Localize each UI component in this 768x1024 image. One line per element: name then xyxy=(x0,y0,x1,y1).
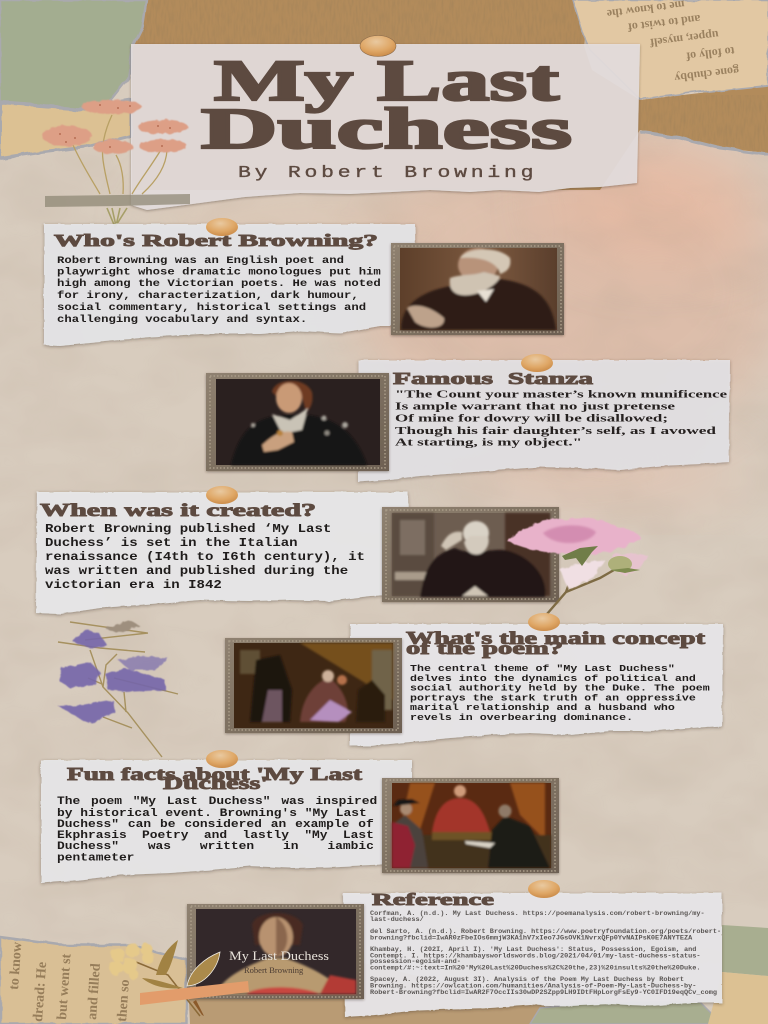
newspaper text: bottom left: and filled xyxy=(85,963,104,1020)
newspaper text: top right: and to twist of xyxy=(626,12,701,35)
reference list: Contempt. I. https://khambaysworldswords.blog/2021/04/01/my-last-duchess-status- xyxy=(370,953,701,959)
newspaper text: bottom left xyxy=(7,941,133,1022)
title text: My Last xyxy=(214,48,560,113)
reference list: Spacey, A. (2022, August 3I). Analysis of the Poem My Last Duchess by Robert xyxy=(370,976,684,983)
newspaper text: top right: to folly of xyxy=(685,44,736,64)
cover author: Robert Browning xyxy=(244,965,304,975)
body text: victorian era in I842 xyxy=(45,578,222,592)
reference list: Khambay, H. (202I, April I). 'My Last Duchess': Status, Possession, Egoism, and xyxy=(370,946,696,953)
reference list: contempt/#:~:text=In%20'My%20Last%20Duchess%2C%20the,23)%20insults%20the%20Duke. xyxy=(370,965,701,971)
body text xyxy=(57,795,377,864)
newspaper text: bottom left: then so xyxy=(115,979,133,1022)
heading: What's the main concept xyxy=(406,628,705,648)
heading second line: Duchess' xyxy=(163,773,268,793)
body text: playwright whose dramatic monologues put him xyxy=(57,266,381,278)
body text: Robert Browning was an English poet and xyxy=(57,255,344,267)
newspaper text: bottom left: dread: He xyxy=(31,961,50,1022)
body text: marital relationship and a husband who xyxy=(410,703,675,714)
heading: When was it created? xyxy=(40,500,316,520)
stanza text: "The Count your master’s known munificence xyxy=(395,388,727,400)
body text: pentameter xyxy=(57,851,134,864)
body text: Duchess’ is set in the Italian xyxy=(45,536,298,550)
newspaper text: top right: upper, myself xyxy=(648,28,719,50)
body text: renaissance (I4th to I6th century), it xyxy=(45,550,365,564)
title panel xyxy=(131,36,640,210)
body text: high among the Victorian poets. He was noted xyxy=(57,278,381,290)
pin xyxy=(528,613,560,631)
newspaper text: top right xyxy=(605,0,740,93)
image: painting of a noblewoman xyxy=(206,373,389,471)
newspaper scrap: bottom left xyxy=(0,937,187,1024)
subtitle: By Robert Browning xyxy=(238,163,537,182)
icon: yellow flowers, leaves and orange tape xyxy=(109,940,249,1016)
body text: for irony, characterization, dark humour, xyxy=(57,290,359,302)
title text second line: Duchess xyxy=(201,96,572,161)
body text: social authority held by the Duke. The poem xyxy=(410,683,710,694)
body text: portrays the stark truth of an oppressive xyxy=(410,693,696,704)
image: portrait of Robert Browning xyxy=(391,243,564,335)
heading second line: of the poem? xyxy=(406,638,563,658)
body text: challenging vocabulary and syntax. xyxy=(57,314,307,326)
panel: Fun facts xyxy=(41,750,412,883)
pin xyxy=(360,36,396,56)
reference list: del Sarto, A. (n.d.). Robert Browning. https://www.poetryfoundation.org/poets/robert- xyxy=(370,928,721,935)
heading: Who's Robert Browning? xyxy=(54,231,378,250)
panel: Famous Stanza xyxy=(358,354,730,482)
panel: When was it created xyxy=(36,486,409,614)
pin xyxy=(528,880,560,898)
body text: by historical event. Browning's "My Last xyxy=(57,807,367,820)
pin xyxy=(521,354,553,372)
body text xyxy=(410,664,710,724)
icon: pink rose xyxy=(507,518,648,614)
body text: Ekphrasis Poetry and lastly "My Last xyxy=(57,829,374,842)
heading: Fun facts about 'My Last xyxy=(67,764,362,784)
body text: revels in overbearing dominance. xyxy=(410,713,633,724)
body text: The central theme of "My Last Duchess" xyxy=(410,664,675,675)
body text: was written and published during the xyxy=(45,564,348,578)
image: photograph of Browning seated xyxy=(382,507,559,602)
reference list: possession-egoism-and- xyxy=(370,958,461,965)
reference list: Corfman, A. (n.d.). My Last Duchess. https://poemanalysis.com/robert-browning/my- xyxy=(370,910,705,917)
cover title: My Last Duchess xyxy=(229,949,329,963)
pin xyxy=(206,750,238,768)
reference list: Browning. https://owlcation.com/humanities/Analysis-of-Poem-My-Last-Duchess-by- xyxy=(370,983,696,989)
body text: delves into the dynamics of political and xyxy=(410,674,696,685)
body text xyxy=(57,255,381,326)
body text: Duchess" was written in iambic xyxy=(57,840,374,853)
image: book cover portrait of the Duchess xyxy=(187,904,364,999)
body text xyxy=(45,522,365,592)
body text: Duchess" can be considered an example of xyxy=(57,818,374,831)
reference list: Robert-Browning?fbclid=IwAR2F7OccIIs30wDP2SZpp9LH9IDtFHpLorgFsEy9-YC0IFD19eqQCv_comg xyxy=(370,989,717,996)
heading: Famous Stanza xyxy=(393,369,594,388)
panel: main concept xyxy=(350,613,723,746)
icon: dried flowers with tape xyxy=(42,100,190,227)
image: domestic scene painting xyxy=(225,638,402,733)
stanza text: Though his fair daughter’s self, as I avowed xyxy=(395,425,716,437)
body text: The poem "My Last Duchess" was inspired xyxy=(57,795,377,808)
reference list xyxy=(370,910,721,996)
stanza text: Of mine for dowry will be disallowed; xyxy=(395,412,668,424)
stanza text: Is ample warrant that no just pretense xyxy=(395,400,675,412)
reference list: last-duchess/ xyxy=(370,916,424,923)
panel: Reference xyxy=(343,880,722,1017)
reference list: browning?fbclid=IwAR0zFbeIOs6mmjW3KA1hV7xIeo7JGsOVK1NvrxQFp0YvNAIPsK0E7ANYTEZA xyxy=(370,935,692,941)
newspaper text: bottom left: to know xyxy=(7,941,25,990)
body text: social commentary, historical settings and xyxy=(57,302,366,314)
stanza text: At starting, is my object." xyxy=(395,436,582,448)
pin xyxy=(206,218,238,236)
pin xyxy=(206,486,238,504)
panel: Who's Robert Browning xyxy=(44,218,416,346)
newspaper text: bottom left: but went st xyxy=(55,953,75,1020)
heading: Reference xyxy=(372,890,495,909)
image: red painting with figures xyxy=(382,778,559,873)
newspaper text: top right: gone chubby xyxy=(674,64,740,85)
body text: Robert Browning published ‘My Last xyxy=(45,522,331,536)
icon: purple dried flowers xyxy=(58,620,178,757)
stanza text xyxy=(395,388,727,448)
